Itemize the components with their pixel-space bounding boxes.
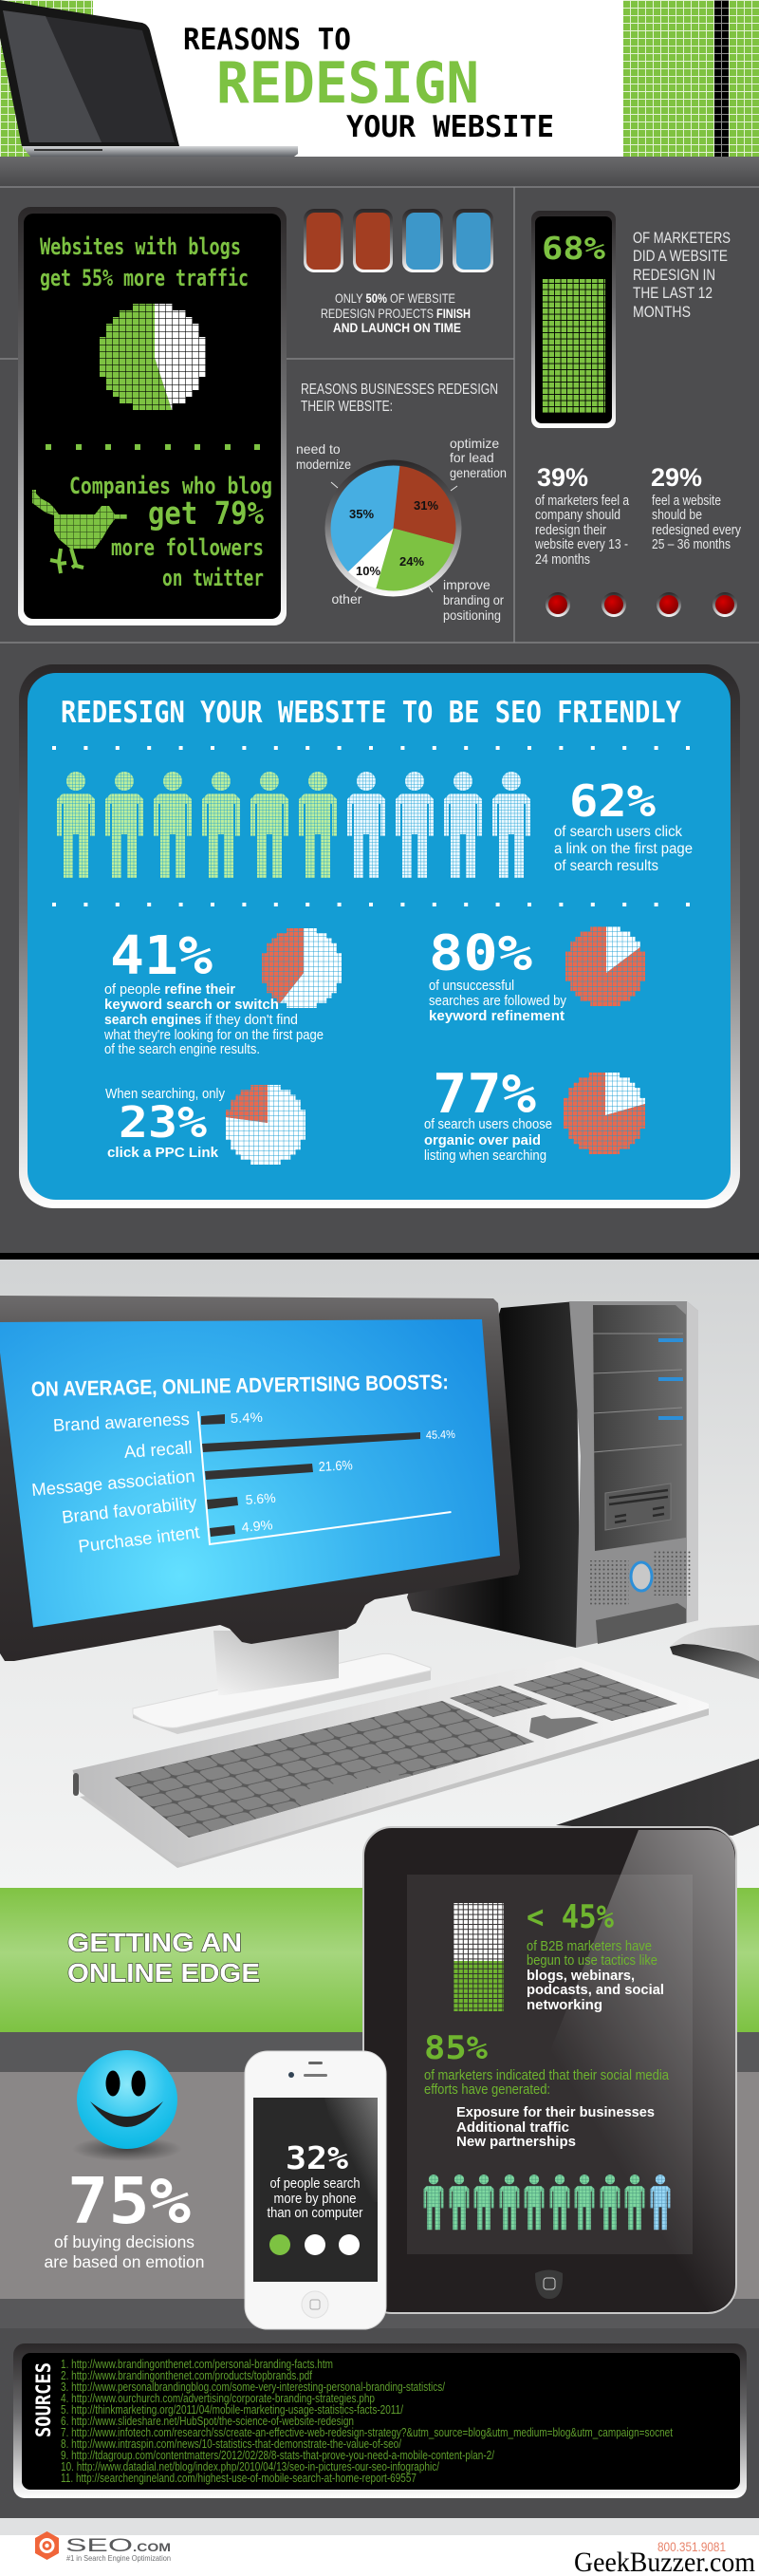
stat: under 45 percent: networking [527, 1998, 602, 2013]
page indicator dots [269, 2234, 360, 2255]
stat: 29 percent: redesigned every [652, 523, 742, 538]
chart: four project tubes [304, 209, 493, 272]
list: source links: 11. http://searchengineland.com/highest-use-of-mobile-search-at-home-report-69557 [61, 2472, 417, 2485]
chart: 45 percent column [454, 1903, 504, 2011]
text: 68 percent of marketers: MONTHS [633, 303, 691, 321]
stat: 85 percent: 85% [424, 2029, 489, 2067]
text: 68 percent of marketers: OF MARKETERS [633, 229, 731, 247]
stat: 77 percent: organic over paid [424, 1133, 541, 1148]
text: companies who blog: on twitter [162, 565, 264, 591]
stat: 75 percent: 75% [67, 2164, 191, 2238]
chart: 41 percent pie [262, 928, 342, 1008]
heading: seo friendly: REDESIGN YOUR WEBSITE TO BE SEO FRIENDLY [61, 696, 681, 730]
stat: 62 percent: of search results [554, 858, 658, 874]
stat: 80 percent: searches are followed by [429, 994, 567, 1009]
icon: smiley [72, 2050, 182, 2161]
chart: advertising bars: Brand awareness [52, 1409, 190, 1435]
chart: 80 percent pie [565, 926, 645, 1006]
icon: tablet home button [535, 2270, 563, 2299]
chart: reasons pie [324, 459, 461, 596]
stat: 32 percent [268, 2139, 362, 2221]
dotted separator [46, 444, 260, 450]
chart: advertising bars: 21.6% [318, 1457, 353, 1474]
pie labels [296, 436, 507, 623]
text: 50 percent finish on time: REDESIGN PROJECTS FINISH [321, 306, 471, 321]
chart: 55 percent pie [100, 304, 206, 410]
stat: 39 percent [534, 463, 630, 568]
stat: 62 percent [554, 775, 693, 874]
list: source links: 3. http://www.personalbrandingblog.com/some-very-interesting-personal-branding-statistics/ [61, 2380, 445, 2394]
chart: reasons pie: 35% [349, 507, 374, 521]
stat: 32 percent: 32% [286, 2139, 348, 2176]
stat: 41 percent: what they're looking for on the first page [103, 1028, 324, 1043]
logo: SEO.com: SEO [65, 2536, 133, 2556]
stat: 39 percent: company should [535, 508, 620, 523]
stat: 80 percent: of unsuccessful [429, 979, 514, 994]
title: REASONS TO [183, 23, 351, 57]
heading: reasons businesses redesign: THEIR WEBSITE: [301, 399, 393, 415]
stat: under 45 percent [527, 1898, 664, 2013]
heading: reasons businesses redesign [301, 382, 498, 415]
heading: online advertising boosts: ON AVERAGE, ONLINE ADVERTISING BOOSTS: [31, 1370, 449, 1401]
list: source links: 5. http://thinkmarketing.org/2011/04/mobile-marketing-usage-statistics-facts-2011/ [61, 2403, 403, 2417]
dotted separators [52, 748, 690, 905]
logo: SEO.com [35, 2531, 171, 2563]
chart: 77 percent pie [564, 1073, 645, 1154]
heading: getting an online edge [67, 1928, 260, 1988]
chart: advertising bars: 45.4% [426, 1428, 455, 1442]
text: 68 percent of marketers [633, 229, 731, 321]
stat: 23 percent [105, 1087, 226, 1161]
stat: 29 percent: should be [652, 508, 702, 523]
panel: SEO friendly [19, 664, 740, 1208]
stat: 85 percent: of marketers indicated that their social media [424, 2068, 670, 2083]
icon: monitor [0, 1296, 520, 1661]
stat: 62 percent: a link on the first page [554, 841, 693, 857]
stat: 85 percent: Additional traffic [456, 2120, 569, 2136]
heading: getting an online edge: GETTING AN [67, 1928, 242, 1957]
stat: 80 percent [429, 925, 567, 1024]
stat: under 45 percent: begun to use tactics like [527, 1953, 657, 1969]
stat: 41 percent: of people refine their [104, 982, 235, 998]
stat: under 45 percent: < 45% [527, 1898, 614, 1936]
stat: 85 percent: New partnerships [456, 2135, 576, 2150]
stat: 32 percent: than on computer [268, 2205, 362, 2221]
stat: under 45 percent: of B2B marketers have [527, 1939, 652, 1954]
title [183, 23, 554, 144]
title: REDESIGN [216, 50, 479, 117]
stat: 77 percent: 77% [433, 1063, 536, 1126]
stat: 80 percent: keyword refinement [429, 1009, 565, 1024]
stat: 29 percent: feel a website [652, 494, 721, 509]
chart: advertising bars: Ad recall [123, 1437, 193, 1462]
chart: reasons pie: 24% [399, 554, 424, 569]
list: source links: 8. http://www.intraspin.com/news/10-statistics-that-demonstrate-the-value-of-seo/ [61, 2437, 401, 2451]
text: 50 percent finish on time [321, 290, 471, 335]
chart: reasons pie: 31% [414, 498, 438, 513]
panel: phone [245, 2051, 386, 2329]
text: phone number: 800.351.9081 [657, 2539, 726, 2554]
chart: advertising bars: Purchase intent [77, 1521, 200, 1557]
text: 68 percent of marketers: DID A WEBSITE [633, 247, 728, 265]
stat: 77 percent: of search users choose [424, 1117, 552, 1132]
panel: tablet [363, 1827, 736, 2313]
list: source links: 6. http://www.slideshare.net/HubSpot/the-science-of-website-redesign [61, 2415, 354, 2428]
pie labels: need to [296, 441, 341, 457]
footer background [0, 2518, 759, 2576]
stat: 77 percent [424, 1063, 552, 1164]
chart: 23 percent pie [226, 1085, 305, 1165]
stat: 39 percent: website every 13 - [534, 537, 628, 552]
heading: getting an online edge: ONLINE EDGE [67, 1958, 260, 1988]
header background [0, 0, 759, 157]
stat: 75 percent: are based on emotion [44, 2252, 205, 2271]
panel: blog statistics screen [18, 207, 287, 625]
stat: 29 percent: 25 – 36 months [652, 537, 731, 552]
stat: 39 percent: 39% [537, 463, 588, 492]
panel: sources [13, 2343, 747, 2498]
stat: 39 percent: of marketers feel a [535, 494, 630, 509]
icon: keyboard [72, 1656, 709, 1868]
stat: 23 percent: When searching, only [105, 1087, 226, 1102]
list: source links: 9. http://tdagroup.com/contentmatters/2012/02/28/8-stats-that-prove-you-need-a-mobile-content-plan-2/ [61, 2449, 494, 2462]
stat: 85 percent: Exposure for their businesses [456, 2105, 655, 2120]
text: websites with blogs: get 55% more traffic [40, 265, 249, 291]
chart: advertising bars: 4.9% [241, 1517, 273, 1535]
chart: advertising bars: Message association [30, 1465, 195, 1500]
chart: ten people [57, 772, 530, 878]
logo: SEO.com: #1 in Search Engine Optimization [66, 2554, 171, 2563]
icon: laptop [0, 0, 298, 157]
stat: 23 percent: 23% [119, 1097, 207, 1148]
text: 50 percent finish on time: AND LAUNCH ON TIME [333, 320, 461, 335]
stat: under 45 percent: podcasts, and social [527, 1983, 664, 1998]
stat: 41 percent: of the search engine results. [104, 1042, 260, 1057]
text: companies who blog: more followers [111, 534, 264, 561]
heading: sources: SOURCES [32, 2362, 55, 2437]
panel: 68 percent gauge [531, 211, 616, 428]
stat: 23 percent: click a PPC Link [107, 1146, 219, 1161]
pie labels: branding or [443, 592, 504, 607]
pie labels: for lead [450, 450, 494, 465]
stat: 32 percent: more by phone [273, 2191, 357, 2207]
chart: advertising bars: Brand favorability [61, 1492, 198, 1527]
stat: 62 percent: 62% [569, 775, 656, 827]
pie labels: generation [450, 465, 507, 480]
stat: 80 percent: 80% [429, 925, 532, 982]
pie labels: improve [443, 577, 491, 592]
stat: 39 percent: 24 months [535, 552, 590, 568]
text: 68 percent of marketers: REDESIGN IN [633, 266, 715, 284]
text: websites with blogs: Websites with blogs [40, 233, 241, 260]
list: source links [61, 2358, 673, 2485]
chart: advertising bars [30, 1409, 455, 1557]
desk background [0, 1253, 759, 1888]
chart: ten small people [424, 2175, 670, 2230]
stat: 32 percent: of people search [269, 2175, 361, 2192]
stat: under 45 percent: blogs, webinars, [527, 1969, 635, 1984]
list: source links: 10. http://www.datadial.net/blog/index.php/2010/04/13/seo-in-pictures-our-seo-infographic/ [61, 2460, 439, 2473]
stat: 41 percent: keyword search or switch [104, 998, 279, 1013]
stat: 29 percent: 29% [651, 463, 702, 492]
text: companies who blog: Companies who blog [69, 473, 272, 499]
icon: mouse [670, 1625, 759, 1679]
pie labels: modernize [296, 457, 351, 472]
stat: 62 percent: of search users click [554, 824, 682, 840]
chart: advertising bars: 5.6% [245, 1490, 276, 1507]
text: 68 percent of marketers: THE LAST 12 [633, 284, 713, 302]
panel: lower section background [0, 1888, 759, 2518]
list: source links: 4. http://www.ourchurch.com/advertising/corporate-branding-strategies.php [61, 2392, 375, 2405]
heading: reasons businesses redesign: REASONS BUSINESSES REDESIGN [301, 382, 498, 398]
logo: SEO.com: .COM [133, 2541, 171, 2554]
list: source links: 1. http://www.brandingonthenet.com/personal-branding-facts.htm [61, 2358, 333, 2371]
icon: monitor stand [133, 1631, 431, 1734]
text: websites with blogs [40, 233, 249, 291]
icons: red indicator lights [546, 592, 737, 617]
pie labels: optimize [450, 436, 499, 451]
stat: 85 percent: efforts have generated: [424, 2082, 550, 2098]
stat: 77 percent: listing when searching [424, 1148, 546, 1164]
stat: 41 percent: search engines if they don't find [104, 1013, 298, 1028]
icon: computer tower [407, 1301, 698, 1648]
list: source links: 2. http://www.brandingonthenet.com/products/topbrands.pdf [61, 2369, 312, 2382]
chart: reasons pie: 10% [356, 564, 380, 578]
stat: 75 percent [44, 2164, 205, 2271]
text: companies who blog [69, 473, 272, 591]
panel: dark statistics background [0, 157, 759, 1260]
chart: advertising bars: 5.4% [231, 1409, 263, 1426]
pie labels: other [332, 591, 362, 607]
stat: 41 percent: 41% [110, 925, 213, 987]
panel: 68 percent gauge: 68% [542, 230, 605, 267]
title: YOUR WEBSITE [346, 110, 554, 144]
icon: twitter bird [32, 490, 127, 573]
stat: 39 percent: redesign their [535, 523, 606, 538]
stat: 75 percent: of buying decisions [54, 2232, 194, 2251]
dark shape behind tablet [556, 1759, 759, 1836]
text: 50 percent finish on time: ONLY 50% OF WEBSITE [335, 290, 455, 306]
stat: 85 percent [424, 2029, 670, 2150]
stat: 29 percent [651, 463, 742, 552]
text: companies who blog: get 79% [148, 495, 264, 532]
pie labels: positioning [443, 607, 501, 623]
stat: 41 percent [103, 925, 324, 1057]
